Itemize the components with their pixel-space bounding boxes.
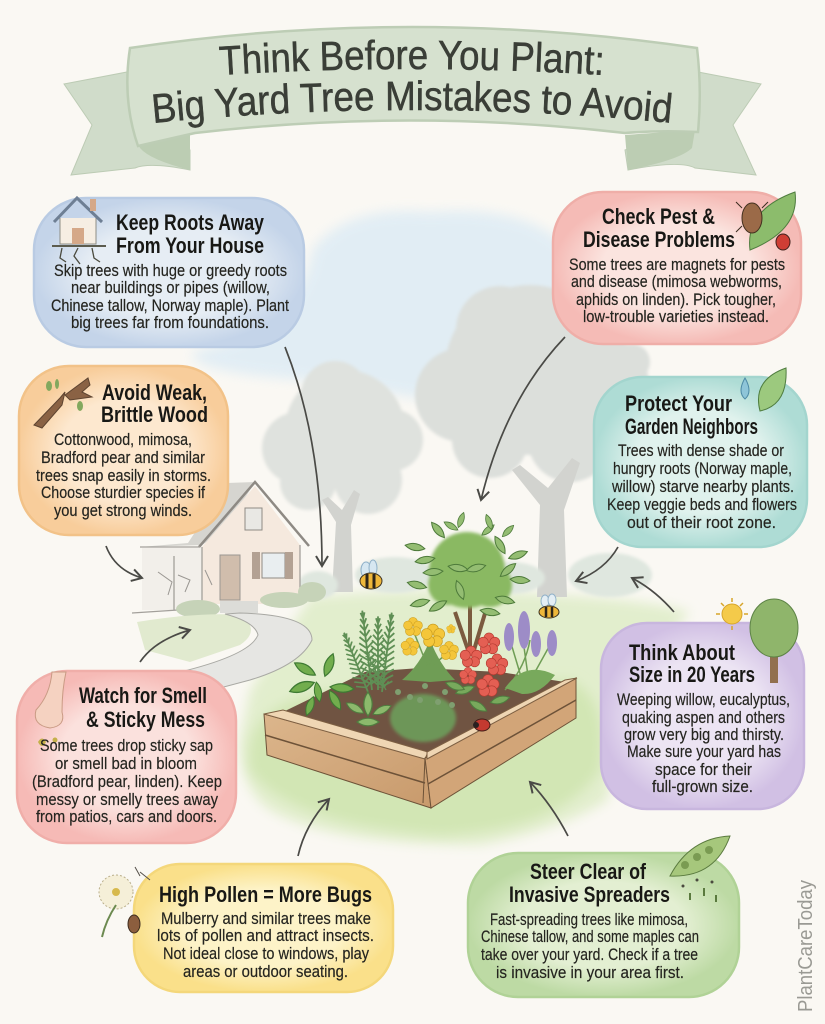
yellow flowers bbox=[401, 617, 458, 682]
left ribbon tail bbox=[64, 72, 190, 175]
body text: and disease (mimosa webworms, bbox=[571, 272, 782, 291]
body text: (Bradford pear, linden). Keep bbox=[32, 772, 222, 791]
body text: Cottonwood, mimosa, bbox=[54, 430, 192, 449]
ribbon main band bbox=[127, 27, 700, 146]
heading: Disease Problems bbox=[583, 227, 735, 252]
body text: willow) starve nearby plants. bbox=[611, 477, 794, 496]
heading bbox=[625, 391, 758, 439]
panel: avoid weak brittle wood bbox=[19, 366, 228, 535]
body text bbox=[32, 736, 222, 826]
body text: Weeping willow, eucalyptus, bbox=[617, 690, 790, 709]
body text: out of their root zone. bbox=[627, 513, 776, 532]
heading bbox=[509, 859, 670, 907]
driveway and front lawn bbox=[137, 613, 312, 692]
body text: aphids on linden). Pick tougher, bbox=[576, 290, 776, 309]
heading: Size in 20 Years bbox=[629, 662, 755, 687]
icon: house with cracked ground bbox=[52, 198, 106, 264]
title line 1: Think Before You Plant: bbox=[218, 39, 602, 75]
heading: From Your House bbox=[116, 233, 264, 258]
panel: watch for smell and sticky mess bbox=[17, 671, 236, 843]
heading: Keep Roots Away bbox=[116, 210, 264, 235]
body text: space for their bbox=[655, 760, 752, 779]
arrows bbox=[106, 337, 674, 856]
background scene: sky wash bbox=[192, 211, 602, 420]
ribbon folds bbox=[132, 130, 695, 170]
body text: low-trouble varieties instead. bbox=[583, 307, 769, 326]
body text: Some trees are magnets for pests bbox=[569, 255, 785, 274]
body text bbox=[481, 910, 699, 982]
background scene: lawn bbox=[240, 590, 690, 845]
background scene: right grey tree bbox=[415, 285, 650, 597]
heading: Invasive Spreaders bbox=[509, 882, 670, 907]
body text: full-grown size. bbox=[652, 777, 753, 796]
heading bbox=[629, 640, 755, 687]
watermark: PlantCareToday bbox=[795, 880, 817, 1012]
body text: big trees far from foundations. bbox=[71, 313, 269, 332]
body text bbox=[607, 441, 797, 532]
right ribbon tail bbox=[625, 72, 761, 175]
body text: lots of pollen and attract insects. bbox=[157, 926, 374, 945]
body text: trees snap easily in storms. bbox=[36, 466, 211, 485]
body text bbox=[617, 690, 790, 796]
lavender bbox=[504, 611, 557, 694]
panel: think about size in 20 years bbox=[601, 598, 804, 809]
body text bbox=[569, 255, 785, 326]
panel: high pollen more bugs bbox=[99, 864, 393, 992]
heading: Watch for Smell bbox=[79, 683, 207, 708]
body text: is invasive in your area first. bbox=[496, 963, 684, 982]
heading: Brittle Wood bbox=[101, 402, 208, 427]
body text: Trees with dense shade or bbox=[618, 441, 784, 460]
heading: Garden Neighbors bbox=[625, 414, 758, 439]
icon: seed pod and sprouts bbox=[670, 836, 730, 902]
icon: nose bbox=[35, 672, 66, 746]
body text: Not ideal close to windows, play bbox=[163, 944, 370, 963]
heading: Avoid Weak, bbox=[102, 380, 207, 405]
small seedling bbox=[345, 692, 393, 726]
panel: keep roots away bbox=[34, 198, 304, 347]
thyme bbox=[390, 683, 456, 742]
panel: check pest and disease bbox=[553, 192, 801, 344]
body text: Choose sturdier species if bbox=[41, 483, 205, 502]
ladybug bbox=[473, 719, 490, 731]
body text: Bradford pear and similar bbox=[41, 448, 205, 467]
body text: Chinese tallow, and some maples can bbox=[481, 927, 699, 946]
icon: sun and tree bbox=[716, 598, 798, 683]
soil bbox=[283, 668, 565, 754]
heading bbox=[101, 380, 208, 427]
body text: hungry roots (Norway maple, bbox=[613, 459, 792, 478]
rosemary bbox=[336, 609, 401, 695]
body text: Mulberry and similar trees make bbox=[161, 909, 371, 928]
heading: High Pollen = More Bugs bbox=[159, 882, 372, 907]
bee left bbox=[360, 560, 382, 589]
body text: quaking aspen and others bbox=[622, 708, 785, 727]
body text bbox=[157, 909, 374, 981]
body text: Chinese tallow, Norway maple). Plant bbox=[51, 296, 289, 315]
body text: Some trees drop sticky sap bbox=[40, 736, 213, 755]
body text: or smell bad in bloom bbox=[55, 754, 197, 773]
heading bbox=[116, 210, 264, 258]
icon: water drop and leaf bbox=[741, 368, 786, 411]
body text: near buildings or pipes (willow, bbox=[71, 278, 270, 297]
basil bbox=[288, 652, 354, 717]
background scene: left grey tree bbox=[262, 361, 423, 592]
house illustration bbox=[132, 482, 326, 618]
icon: beetle on leaf with ladybug bbox=[736, 192, 795, 250]
panel: protect your garden neighbors bbox=[594, 368, 807, 547]
red flowers bbox=[444, 633, 511, 714]
panel: steer clear of invasive spreaders bbox=[468, 836, 739, 997]
icon: snapped branch bbox=[34, 378, 92, 428]
icon: dandelion and bug bbox=[99, 867, 150, 937]
body text bbox=[36, 430, 211, 520]
heading: Protect Your bbox=[625, 391, 732, 416]
body text: Skip trees with huge or greedy roots bbox=[54, 261, 287, 280]
body text: messy or smelly trees away bbox=[36, 790, 219, 809]
front-right wood boards bbox=[423, 678, 577, 808]
bee right bbox=[539, 594, 559, 618]
body text bbox=[51, 261, 289, 332]
title line 2: Big Yard Tree Mistakes to Avoid bbox=[153, 80, 672, 128]
body text: areas or outdoor seating. bbox=[183, 962, 348, 981]
heading: Check Pest & bbox=[602, 204, 715, 229]
background scene: distant shrubs bbox=[298, 553, 652, 599]
title banner bbox=[63, 26, 762, 176]
heading: Think About bbox=[629, 640, 735, 665]
front-left wood boards bbox=[264, 710, 431, 808]
heading: Steer Clear of bbox=[530, 859, 646, 884]
heading bbox=[583, 204, 735, 252]
body text: Fast-spreading trees like mimosa, bbox=[490, 910, 688, 929]
body text: grow very big and thirsty. bbox=[624, 725, 784, 744]
heading: & Sticky Mess bbox=[86, 707, 205, 732]
body text: Make sure your yard has bbox=[627, 742, 781, 761]
body text: take over your yard. Check if a tree bbox=[481, 945, 698, 964]
tree in bed bbox=[405, 512, 530, 650]
heading bbox=[79, 683, 207, 732]
body text: you get strong winds. bbox=[54, 501, 192, 520]
raised garden bed bbox=[264, 512, 577, 808]
body text: from patios, cars and doors. bbox=[36, 807, 217, 826]
